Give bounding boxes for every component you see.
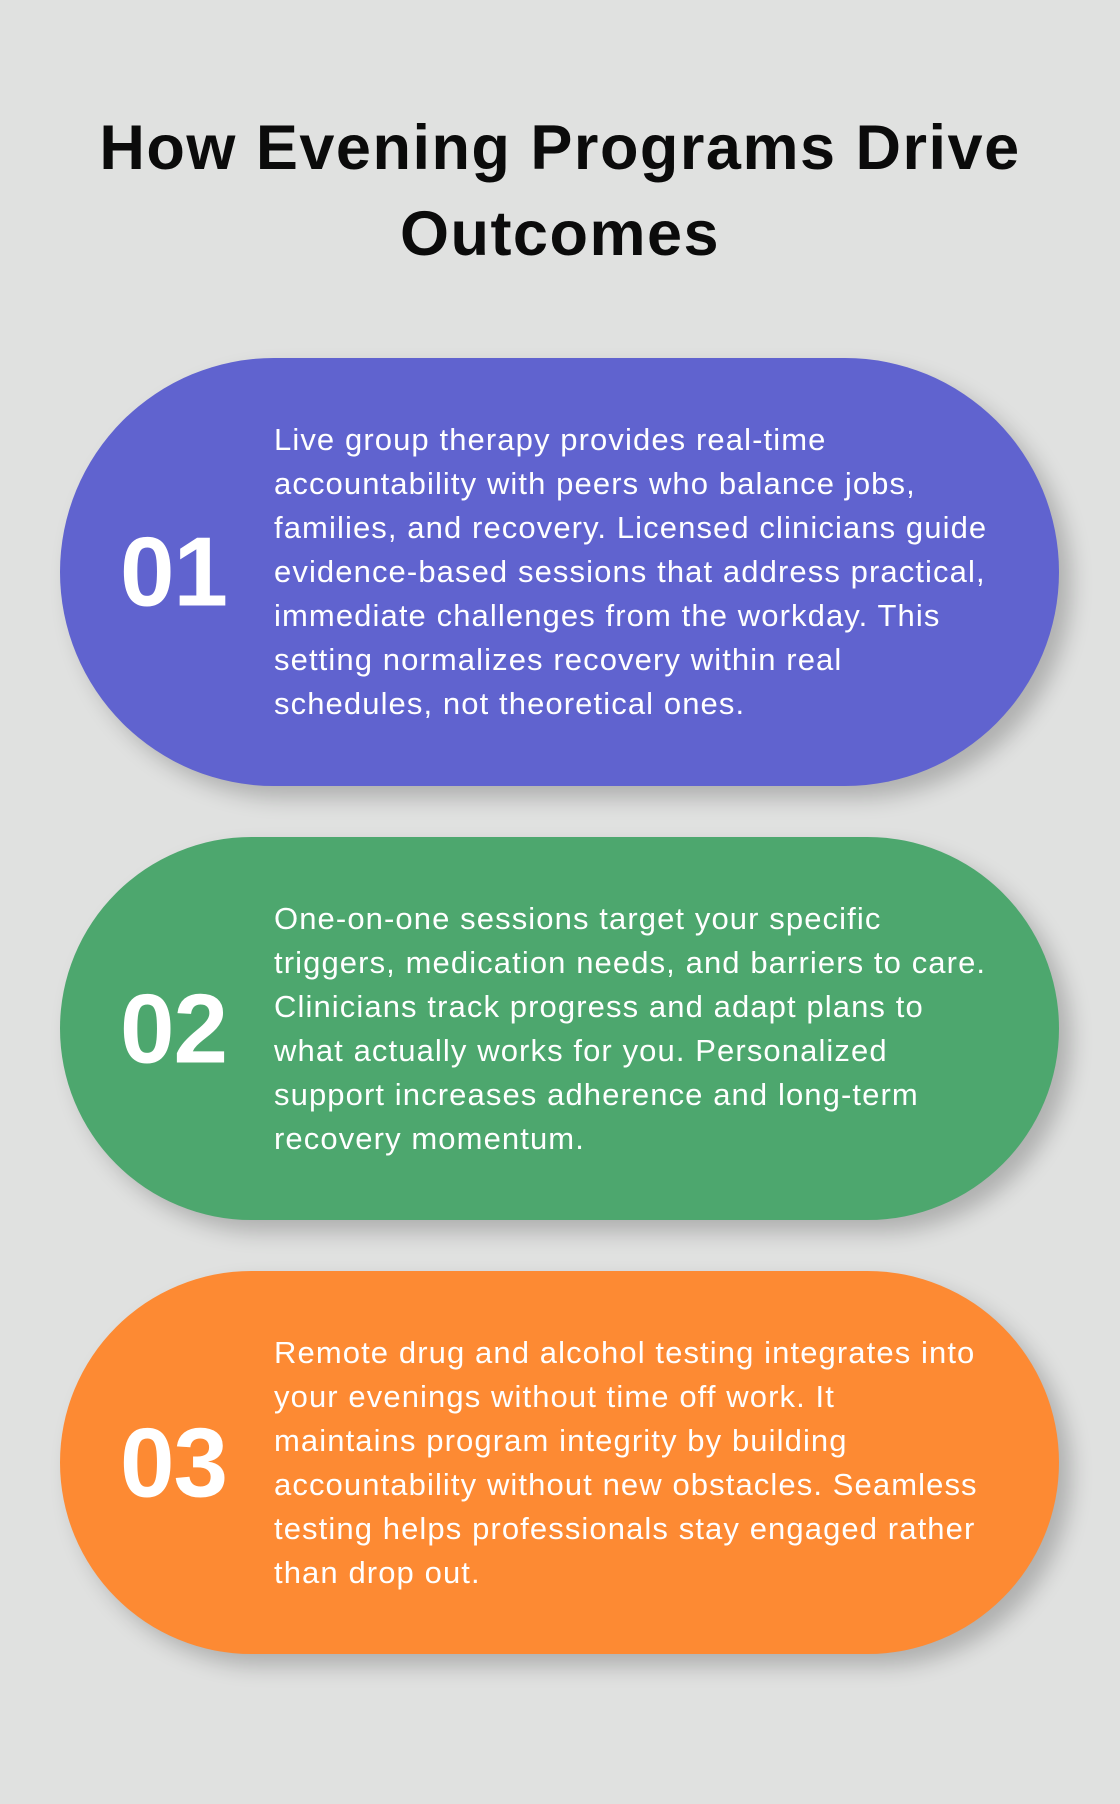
number 01: 01: [120, 516, 227, 626]
title: Outcomes: [400, 199, 720, 269]
text block 03: testing helps professionals stay engaged rather: [274, 1510, 975, 1546]
text block 03: Remote drug and alcohol testing integrates into: [274, 1334, 975, 1370]
text block 01: [274, 422, 987, 721]
text block 01: setting normalizes recovery within real: [274, 642, 842, 677]
text block 02: [274, 900, 986, 1156]
title: How Evening Programs Drive: [99, 113, 1021, 183]
panel: 01 group therapy: [60, 358, 1059, 786]
number 02: 02: [120, 973, 227, 1083]
text block 02: support increases adherence and long-term: [274, 1076, 919, 1112]
text block 01: evidence-based sessions that address practical,: [274, 554, 986, 589]
text block 02: what actually works for you. Personalized: [274, 1032, 888, 1068]
text block 01: schedules, not theoretical ones.: [274, 686, 745, 721]
text block 02: recovery momentum.: [274, 1120, 585, 1156]
text block 03: accountability without new obstacles. Seamless: [274, 1466, 978, 1502]
text block 03: maintains program integrity by building: [274, 1422, 848, 1458]
text block 01: accountability with peers who balance jobs,: [274, 466, 916, 501]
text block 02: Clinicians track progress and adapt plans to: [274, 988, 924, 1024]
text block 03: than drop out.: [274, 1554, 481, 1590]
number 03: 03: [120, 1407, 227, 1517]
text block 01: Live group therapy provides real-time: [274, 422, 826, 457]
panel: 02 one-on-one sessions: [60, 837, 1059, 1220]
title: [99, 113, 1021, 269]
text block 02: One-on-one sessions target your specific: [274, 900, 881, 936]
text block 01: families, and recovery. Licensed clinicians guide: [274, 510, 987, 545]
text block 01: immediate challenges from the workday. This: [274, 598, 940, 633]
text block 03: your evenings without time off work. It: [274, 1378, 835, 1414]
text block 02: triggers, medication needs, and barriers to care.: [274, 944, 986, 980]
panel: 03 remote testing: [60, 1271, 1059, 1654]
text block 03: [274, 1334, 978, 1590]
